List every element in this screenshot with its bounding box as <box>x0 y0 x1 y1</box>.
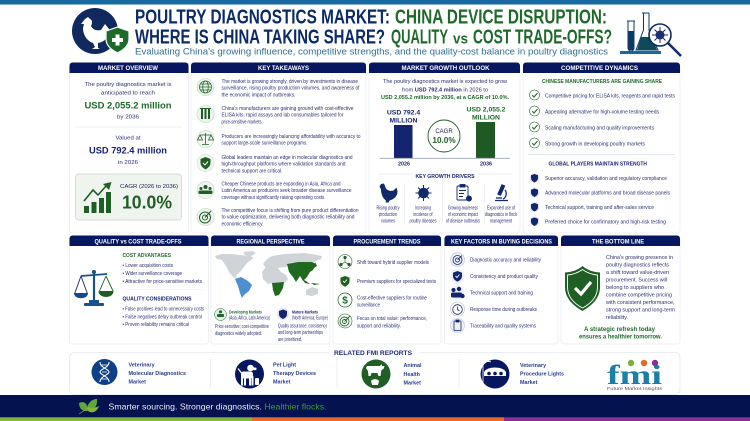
heading: procurement trends: PROCUREMENT TRENDS <box>354 238 421 245</box>
text: cost advantages: • Lower acquisition costs <box>122 263 173 269</box>
driver: incidence of diseases: Increasing <box>415 206 431 212</box>
report: veterinary procedure lights <box>520 363 564 386</box>
text: cost advantages: • Wider surveillance coverage <box>122 271 182 277</box>
icon: farm animals <box>362 360 390 388</box>
legend: mature markets: Mature Markets <box>292 310 318 316</box>
text: 2036 market value: The poultry diagnostics market is <box>84 82 172 88</box>
icon: shield check <box>197 154 214 172</box>
heading: quality vs cost: QUALITY vs COST TRADE-OFFS <box>94 238 182 245</box>
icon: premium shield <box>338 274 352 288</box>
text: takeaway 1: The market is growing strongly, driven by investments in disease <box>222 79 358 85</box>
factor: technical support: Technical support and training <box>470 290 533 296</box>
callout: strategic refresh <box>579 326 662 340</box>
text: 2036 market value: by 2036 <box>117 114 139 120</box>
driver: economic awareness: Growing awareness <box>448 206 478 212</box>
report: pet light therapy <box>273 362 316 386</box>
text: takeaway 6: to value optimization, delivering both diagnostic reliability and <box>222 215 355 221</box>
text: outlook summary: The poultry diagnostics market is expected to grow <box>383 79 507 85</box>
report: veterinary molecular diagnostics: Market <box>128 380 146 386</box>
icon: DNA <box>92 359 118 385</box>
report: pet light therapy: Market <box>273 380 291 386</box>
text: bottom line summary: with consistent performance, <box>606 300 674 306</box>
text: cost advantages: • Attractive for price-sensitive markets <box>122 279 202 285</box>
heading: chinese manufacturers: CHINESE MANUFACTURERS ARE GAINING SHARE <box>542 79 662 85</box>
bar chart: market size 2026 vs 2036: 2026 <box>398 162 410 168</box>
report: animal health <box>404 363 422 386</box>
icon: hybrid suppliers <box>338 254 352 268</box>
driver: incidence of diseases: poultry diseases <box>410 218 437 224</box>
heading: market growth outlook: MARKET GROWTH OUTLOOK <box>402 65 490 72</box>
list: global strengths: Preferred choice for confirmatory and high-risk testing <box>545 220 666 226</box>
text: bottom line summary: combine competitive pricing <box>606 292 672 298</box>
icon: rising bar chart <box>84 182 112 213</box>
icon: quality shield <box>450 269 464 283</box>
heading: global players: GLOBAL PLAYERS MAINTAIN STRENGTH <box>548 162 647 168</box>
trend: cost-effective suppliers: surveillance <box>357 302 380 308</box>
text: quality considerations <box>122 296 204 328</box>
trend: premium suppliers: Premium suppliers for specialized tests <box>357 279 436 285</box>
text: bottom line summary: poultry diagnostics reflects <box>606 262 669 268</box>
icon: clipboard with coin <box>457 184 472 201</box>
text: takeaway 1 <box>222 79 360 98</box>
title: POULTRY DIAGNOSTICS MARKET: <box>135 6 390 28</box>
icon: leaves <box>79 399 99 414</box>
title: QUALITY <box>391 26 448 48</box>
text: takeaway 2: China's manufacturers are gaining ground with cost-effective <box>222 106 354 112</box>
icon: hen and health shield logo <box>72 8 129 54</box>
footer banner <box>0 395 750 418</box>
callout: CAGR circle: 10.0% <box>432 136 456 145</box>
text: quality considerations: • False positives lead to unnecessary costs <box>122 306 204 312</box>
bar chart: market size 2026 vs 2036: USD 792.4 <box>387 110 420 116</box>
bar chart: market size 2026 vs 2036 <box>380 106 510 168</box>
heading: market growth outlook <box>369 62 520 73</box>
text: quality considerations: • Proven reliability remains critical <box>122 322 189 328</box>
callout: strategic refresh: A strategic refresh today <box>584 326 655 333</box>
report: veterinary procedure lights: Market <box>520 380 538 386</box>
title: WHERE IS CHINA TAKING SHARE? <box>135 26 385 48</box>
text: 2036 market value: USD 2,055.2 million <box>84 100 172 112</box>
driver: flock diagnostics <box>485 206 517 224</box>
subtitle: Evaluating China's growing influence, competitive strengths, and the quality-cost balance in poultry diagnostics <box>135 46 608 58</box>
bar chart: market size 2026 vs 2036: MILLION <box>390 118 418 124</box>
legend: mature markets: and long-term partnerships <box>278 330 323 336</box>
report: pet light therapy: Therapy Devices <box>273 371 316 377</box>
heading: market overview <box>70 62 188 73</box>
logo: Future Market Insights: Future Market Insights <box>607 386 663 392</box>
text: takeaway 1: surveillance, rising poultry production volumes, and awareness of <box>222 86 360 92</box>
driver: flock diagnostics: Expanded use of <box>487 206 515 212</box>
heading: key growth drivers <box>378 174 512 180</box>
text: bottom line summary <box>606 255 675 321</box>
trend: cost-effective suppliers: Cost-effective suppliers for routine <box>357 296 427 302</box>
heading: key takeaways: KEY TAKEAWAYS <box>258 65 310 72</box>
text: takeaway 4: high-throughput platforms where validation standards and <box>222 162 346 168</box>
legend: mature markets <box>277 308 328 343</box>
icon: globe <box>197 78 214 96</box>
driver: incidence of diseases <box>410 206 437 224</box>
heading: the bottom line: THE BOTTOM LINE <box>592 238 645 245</box>
trend: total value focus: Focus on total value: performance, <box>357 316 427 322</box>
legend: developing markets: Developing Markets <box>229 310 262 316</box>
icon: clock <box>450 302 464 316</box>
trend: total value focus: support and reliability. <box>357 324 401 330</box>
panel: the bottom line <box>561 236 680 344</box>
text: bottom line summary: a shift toward value-driven <box>606 270 669 276</box>
panel: competitive dynamics <box>523 62 680 233</box>
text: takeaway 2: price-sensitive markets. <box>222 119 262 125</box>
heading: competitive dynamics <box>523 62 680 73</box>
bar chart: market size 2026 vs 2036: MILLION <box>472 114 500 122</box>
text: cost advantages <box>122 253 202 285</box>
logo: Future Market Insights <box>607 360 663 392</box>
heading: key takeaways <box>191 62 366 73</box>
heading: competitive dynamics: COMPETITIVE DYNAMICS <box>561 65 639 72</box>
report: pet light therapy: Pet Light <box>273 362 296 368</box>
legend: mature markets: are prioritized. <box>278 337 302 343</box>
top accent bar <box>0 0 750 4</box>
factor: traceability: Traceability and quality systems <box>470 323 536 329</box>
list: global strengths <box>530 173 670 226</box>
report: animal health: Health <box>404 372 420 378</box>
icon: large shield check <box>565 266 600 311</box>
driver: rising poultry production: production <box>379 212 397 218</box>
bottom colour stripes <box>0 417 750 421</box>
text: quality considerations: • False negatives delay outbreak control <box>122 314 202 320</box>
icon: lab flasks with magnifier <box>620 13 681 56</box>
legend: developing markets: Price-sensitive; cost-competitive <box>215 324 269 330</box>
list: global strengths: Advanced molecular platforms and broad disease panels <box>545 190 670 196</box>
panel: related FMI reports <box>70 349 680 394</box>
report: veterinary procedure lights: Veterinary <box>520 363 546 369</box>
text: takeaway 4: technical support are critical. <box>222 168 282 174</box>
text: takeaway 4: Global leaders maintain an edge in molecular diagnostics and <box>222 155 353 161</box>
title: CHINA DEVICE DISRUPTION: <box>395 6 607 28</box>
text: 2036 market value: anticipated to reach <box>101 91 155 97</box>
report: veterinary molecular diagnostics: Molecular Diagnostics <box>128 371 186 377</box>
text: 2026 market value <box>89 136 167 166</box>
text: 2036 market value <box>84 82 172 120</box>
text: takeaway 3 <box>222 134 361 146</box>
icon: dollar: $ <box>342 296 348 306</box>
icon: surgical light <box>480 360 510 388</box>
factor: consistency: Consistency and product quality <box>470 274 538 280</box>
text: takeaway 5: Cheaper Chinese products are expanding in Asia, Africa and <box>222 181 341 187</box>
trend: cost-effective suppliers <box>357 296 427 308</box>
text: takeaway 3: Producers are increasingly balancing affordability with accuracy to <box>222 134 361 140</box>
text: bottom line summary: strong support and long-term <box>606 308 675 314</box>
trend: hybrid supplier models: Shift toward hybrid supplier models <box>357 260 429 266</box>
heading: related reports: RELATED FMI REPORTS <box>334 350 412 357</box>
list: global strengths: Superior accuracy, validation and regulatory compliance <box>545 176 667 182</box>
driver: economic awareness <box>446 206 480 224</box>
report: veterinary molecular diagnostics <box>128 362 186 386</box>
icon: target <box>197 208 214 226</box>
legend: developing markets: (Asia, Africa, Latin America) <box>229 316 270 322</box>
legend: mature markets: Quality assurance, consistency <box>278 323 327 329</box>
text: 2026 market value: in 2026 <box>118 160 138 166</box>
panel: market overview <box>70 62 188 233</box>
panel: market growth outlook <box>369 62 520 233</box>
list: global strengths: Technical support, training and after-sales service <box>545 205 654 211</box>
text: bottom line summary: procurement. Success will <box>606 278 667 284</box>
logo: Future Market Insights: fmi <box>607 360 663 390</box>
list: chinese strengths: Appealing alternative for high-volume testing needs <box>545 109 659 115</box>
text: takeaway 6: economic efficiency. <box>222 221 264 227</box>
text: takeaway 1: the economic impact of outbreaks. <box>222 92 296 98</box>
legend: developing markets: diagnostics widely adopted. <box>215 331 262 337</box>
callout: CAGR <box>76 174 182 220</box>
list: chinese strengths: Competitive pricing for ELISA kits, reagents and rapid tests <box>545 93 675 99</box>
text: takeaway 6 <box>222 208 359 227</box>
icon: technical support <box>450 286 465 300</box>
report: veterinary molecular diagnostics: Veterinary <box>128 362 155 368</box>
callout: CAGR circle <box>428 120 460 152</box>
factor: accuracy: Diagnostic accuracy and reliability <box>470 258 541 264</box>
driver: economic awareness: of disease outbreaks <box>446 218 480 224</box>
legend: mature markets: (North America, Europe) <box>292 316 328 322</box>
text: 2026 market value: USD 792.4 million <box>89 146 167 156</box>
text: cost advantages: COST ADVANTAGES <box>122 253 171 259</box>
icon: microscope <box>495 185 508 200</box>
text: takeaway 2 <box>222 106 354 125</box>
text: quality considerations: QUALITY CONSIDERATIONS <box>122 296 192 302</box>
icon: scales <box>197 130 214 148</box>
trend: total value focus <box>357 316 427 330</box>
driver: rising poultry production <box>376 206 400 224</box>
text: bottom line summary: reliability. <box>606 315 628 321</box>
icon: people group <box>197 182 214 198</box>
panel: procurement trends <box>333 236 441 344</box>
text: bottom line summary: China's growing presence in <box>606 255 673 261</box>
icon: accuracy target <box>450 253 464 267</box>
list: chinese strengths: Strong growth in developing poultry markets <box>545 141 645 147</box>
icon: dog with light device <box>235 360 264 388</box>
text: outlook summary <box>381 79 510 101</box>
text: takeaway 3: support large-scale surveillance programs. <box>222 140 308 146</box>
callout: CAGR circle: CAGR <box>435 129 453 135</box>
callout: CAGR: CAGR (2026 to 2036) <box>120 184 178 190</box>
report: animal health: Market <box>404 380 421 386</box>
text: takeaway 6: The competitive focus is shifting from pure product differentiation <box>222 208 359 214</box>
chart: world map <box>215 251 322 298</box>
tagline: Smarter sourcing. Stronger diagnostics. Healthier flocks. <box>108 402 326 412</box>
bar chart: market size 2026 vs 2036: 2036 <box>480 162 492 168</box>
title <box>135 6 612 48</box>
driver: flock diagnostics: management <box>490 218 512 224</box>
text: outlook summary: USD 2,055.2 million by 2036, at a CAGR of 10.0%. <box>381 95 510 101</box>
text: outlook summary: from USD 792.4 million in 2026 to <box>402 88 488 94</box>
factor: response time: Response time during outbreaks <box>470 307 537 313</box>
driver: economic awareness: of economic impact <box>448 212 478 218</box>
icon: balance scale <box>74 270 114 306</box>
text: takeaway 4 <box>222 155 353 174</box>
heading: regional perspective: REGIONAL PERSPECTIVE <box>236 238 305 245</box>
legend: developing markets <box>214 308 270 337</box>
icon: clipboard <box>450 318 464 332</box>
list: chinese strengths: Scaling manufacturing and quality improvements <box>545 125 654 131</box>
title: COST TRADE-OFFS? <box>473 26 612 48</box>
icon: virus <box>416 185 432 201</box>
callout: CAGR: 10.0% <box>122 192 172 212</box>
icon: test tubes <box>197 106 214 122</box>
driver: rising poultry production: Rising poultry <box>376 206 400 212</box>
heading: key growth drivers: KEY GROWTH DRIVERS <box>416 174 475 180</box>
list: chinese strengths <box>530 90 675 148</box>
panel: key takeaways <box>191 62 366 233</box>
bar chart: market size 2026 vs 2036: USD 2,055.2 <box>467 106 506 114</box>
report: animal health: Animal <box>404 363 422 369</box>
icon: target <box>338 314 352 328</box>
text: bottom line summary: belong to suppliers who <box>606 285 664 291</box>
panel: regional perspective <box>211 236 330 344</box>
driver: flock diagnostics: diagnostics in flock <box>485 212 517 218</box>
icon: hen <box>380 184 398 202</box>
text: takeaway 2: ELISA kits, rapid assays and lab consumables tailored for <box>222 113 344 119</box>
panel: key factors in buying decisions <box>444 236 558 344</box>
text: 2026 market value: Valued at <box>116 136 141 142</box>
report: veterinary procedure lights: Procedure Lights <box>520 372 564 378</box>
panel: quality vs cost trade-offs <box>70 236 208 344</box>
driver: incidence of diseases: incidence of <box>414 212 433 218</box>
heading: market overview: MARKET OVERVIEW <box>98 65 159 72</box>
heading: key factors: KEY FACTORS IN BUYING DECISIONS <box>451 238 553 245</box>
text: takeaway 5: coverage without significantly raising operating costs. <box>222 195 326 201</box>
text: takeaway 5: Latin America as producers seek broader disease surveillance <box>222 188 352 194</box>
text: takeaway 5 <box>222 181 352 201</box>
callout: strategic refresh: ensures a healthier tomorrow. <box>579 333 662 340</box>
driver: rising poultry production: volumes <box>381 218 395 224</box>
title: vs <box>453 30 468 48</box>
